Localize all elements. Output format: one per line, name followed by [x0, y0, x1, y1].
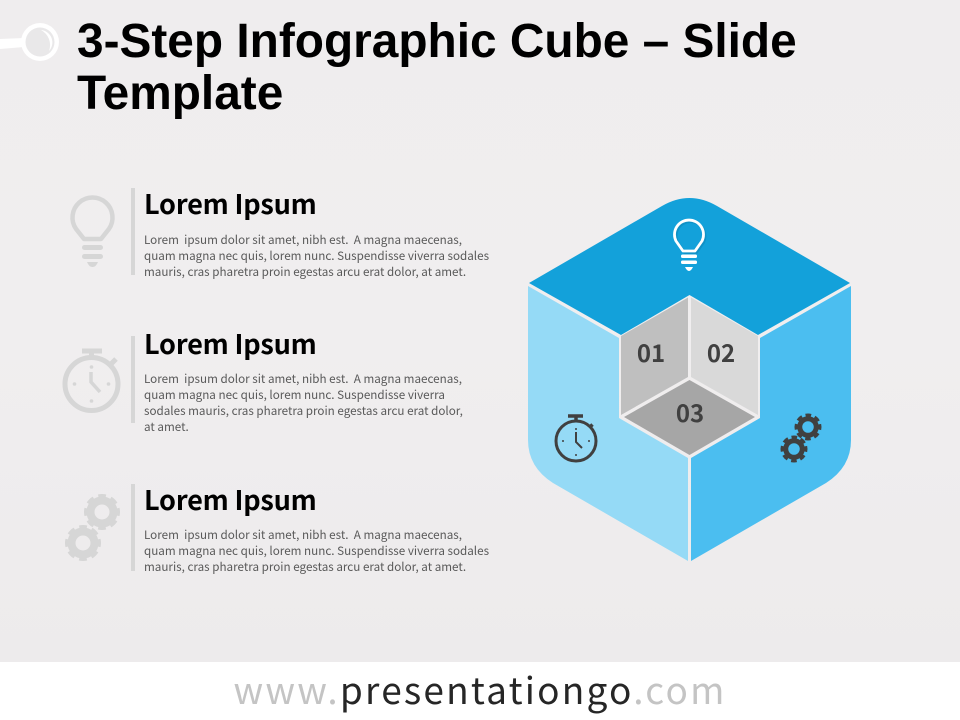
number 02: 02: [707, 334, 735, 369]
step 2 body: sodales mauris, cras pharetra proin egestas arcu erat dolor,: [144, 402, 463, 419]
icon: dark gears: [780, 413, 822, 463]
number 03: 03: [676, 394, 704, 429]
cube face: left: [528, 286, 688, 561]
step 2 body: at amet.: [144, 418, 189, 435]
icon: dark stopwatch: [556, 416, 596, 461]
step 3 body: [144, 526, 489, 575]
step 1 body: quam magna nec quis, lorem nunc. Suspendisse viverra sodales: [144, 247, 489, 264]
inner panel 03: [624, 380, 755, 455]
step 3 body: mauris, cras pharetra proin egestas arcu erat dolor, at amet.: [144, 558, 466, 575]
icon: grey gears: [65, 494, 120, 561]
step 3 divider: [131, 484, 135, 571]
step 2 divider: [131, 336, 135, 423]
cube face: top: [529, 198, 850, 335]
icon: grey light bulb: [70, 195, 115, 267]
step 1 divider: [131, 188, 135, 275]
step 2 heading: Lorem Ipsum: [144, 323, 317, 362]
title: Template: [77, 67, 283, 120]
inner panel 02: [691, 298, 758, 415]
icon: grey stopwatch: [62, 348, 120, 413]
step 2 body: quam magna nec quis, lorem nunc. Suspendisse viverra: [144, 386, 445, 403]
step 2 body: [144, 370, 463, 435]
step 1 body: mauris, cras pharetra proin egestas arcu erat dolor, at amet.: [144, 263, 466, 280]
step 3 body: quam magna nec quis, lorem nunc. Suspendisse viverra sodales: [144, 542, 489, 559]
icon: white light bulb: [674, 220, 705, 271]
step 1 body: [144, 231, 489, 280]
inner panel 01: [621, 298, 688, 415]
icon: title pin: [0, 23, 59, 61]
title: 3-Step Infographic Cube – Slide: [77, 15, 797, 68]
step 1 body: Lorem ipsum dolor sit amet, nibh est. A magna maecenas,: [144, 231, 462, 248]
title: [77, 15, 797, 120]
number 01: 01: [637, 334, 665, 369]
step 3 body: Lorem ipsum dolor sit amet, nibh est. A magna maecenas,: [144, 526, 462, 543]
step 3 heading: Lorem Ipsum: [144, 479, 317, 518]
panel: step 3 text: [131, 479, 489, 575]
panel: step 1 text: [131, 183, 489, 280]
step 2 body: Lorem ipsum dolor sit amet, nibh est. A magna maecenas,: [144, 370, 462, 387]
panel: step 2 text: [131, 323, 463, 435]
step 1 heading: Lorem Ipsum: [144, 183, 317, 222]
cube face: right: [691, 286, 851, 561]
footer: website url: [0, 662, 960, 720]
chart: hexagonal cube: [528, 198, 851, 561]
footer: website url: www.presentationgo.com: [233, 661, 727, 715]
